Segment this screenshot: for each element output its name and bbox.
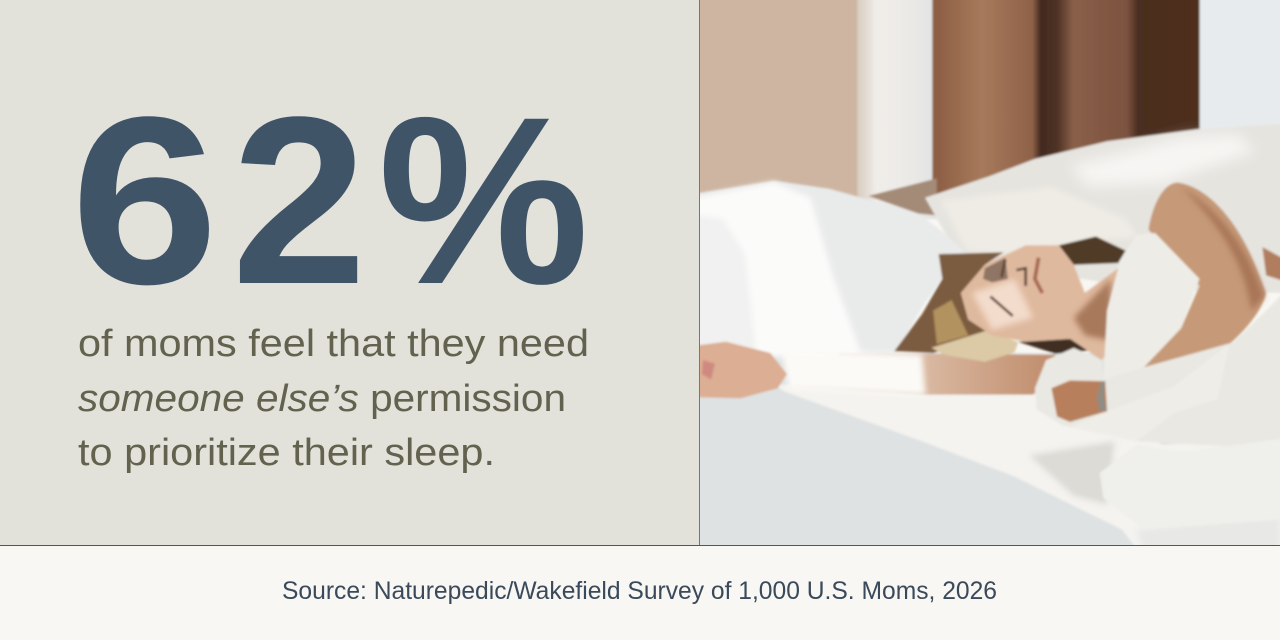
hand and wrist bbox=[1052, 381, 1107, 422]
sheer curtain left bbox=[857, 0, 937, 219]
upper arm and shoulder bbox=[1144, 181, 1268, 368]
sheer curtain right bbox=[1200, 0, 1280, 148]
big number: 62%: % bbox=[378, 67, 589, 334]
statistic description: someone else’s permission bbox=[78, 378, 566, 420]
source text: Source: Naturepedic/Wakefield Survey of 1,000 U.S. Moms, 2026 bbox=[282, 577, 997, 605]
right pillow bbox=[925, 124, 1280, 293]
face and neck bbox=[961, 245, 1118, 360]
bed sheet bbox=[700, 350, 1172, 545]
panel: statistic bbox=[0, 0, 699, 545]
photo: woman sleeping in bed bbox=[693, 0, 1280, 558]
statistic description bbox=[78, 323, 589, 474]
divider line bbox=[0, 545, 1280, 546]
bracelet bbox=[1097, 381, 1106, 411]
big number: 62% bbox=[70, 67, 589, 334]
big number: 62%: 2 bbox=[232, 68, 367, 334]
brown curtain bbox=[932, 0, 1203, 198]
big number: 62%: 6 bbox=[70, 67, 219, 334]
left pillow bbox=[693, 181, 967, 357]
arm and hand left bbox=[852, 352, 1056, 396]
statistic description: of moms feel that they need bbox=[78, 323, 589, 365]
source footer bbox=[0, 546, 1280, 640]
statistic description: to prioritize their sleep. bbox=[78, 432, 495, 474]
wall bbox=[700, 0, 858, 198]
headboard bbox=[868, 178, 937, 215]
hair bbox=[894, 252, 1003, 353]
nightgown sheet bbox=[1103, 233, 1200, 379]
